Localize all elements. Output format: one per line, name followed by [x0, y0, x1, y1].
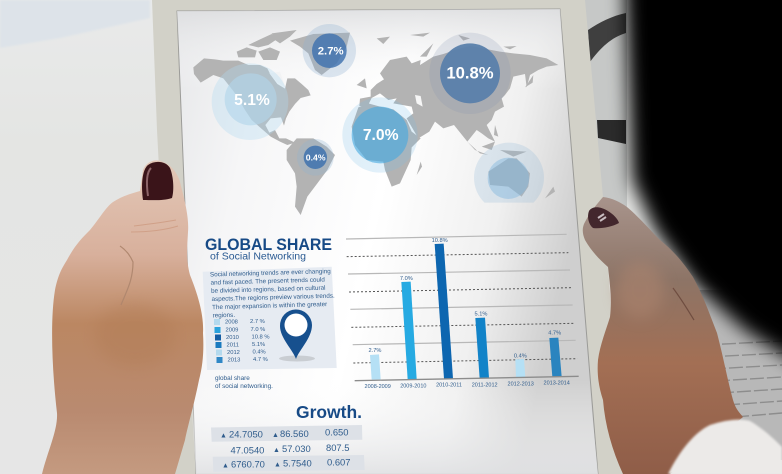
caption: of social networking. [215, 383, 273, 390]
legend: 5.1% [252, 342, 265, 348]
tablet frame [152, 0, 623, 474]
legend: 2011 [226, 342, 239, 348]
axis labels: 2009-2010 [400, 383, 426, 389]
bubble: 2.7% [303, 24, 356, 77]
legend [214, 319, 270, 364]
description text: and fast paced. The present trends could [210, 276, 325, 287]
description text: aspects.The regions preview various trends. [211, 293, 335, 303]
bubble: 7.0% [342, 97, 418, 173]
axis labels [365, 381, 570, 390]
description text [210, 268, 336, 319]
legend: 2008 [225, 320, 238, 326]
bubble: 10.8%: 10.8% [446, 64, 494, 83]
map: Eurasia [359, 46, 558, 142]
bar chart [346, 234, 579, 390]
legend: 0.4% [252, 350, 266, 356]
legend: 2010 [226, 335, 239, 341]
map: Africa [352, 103, 421, 187]
title: Global Share: GLOBAL SHARE [205, 236, 332, 254]
sleeve [668, 420, 782, 474]
description text: regions. [213, 312, 235, 319]
growth table: 0.650 [325, 426, 348, 438]
bubble: 10.8% [429, 33, 511, 114]
axis labels: 2011-2012 [472, 382, 498, 388]
growth table: 807.5 [326, 442, 349, 453]
growth table: 86.560 [280, 428, 309, 439]
title: Global Share: of Social Networking [210, 252, 306, 262]
bubble: 0.4% [297, 139, 334, 176]
growth table: 6760.70 [231, 458, 265, 470]
description text: Social networking trends are ever changing [210, 268, 331, 278]
description text: The major expansion is within the greater [212, 301, 327, 311]
bubble: 5.1%: 5.1% [234, 92, 270, 109]
growth table: 0.607 [327, 456, 350, 468]
legend: 10.8 % [252, 334, 270, 340]
right hand [583, 197, 743, 474]
background: mug and dark area [585, 0, 782, 460]
value labels: 10.8% [432, 238, 448, 244]
legend: 4.7 % [253, 357, 268, 363]
bubble: 2.7%: 2.7% [318, 45, 344, 57]
growth table: 24.7050 [229, 428, 263, 440]
growth table: ▲ [272, 432, 279, 439]
map: North America [193, 58, 311, 145]
map: Australia [488, 158, 530, 197]
growth table: ▲ [222, 462, 229, 470]
world map [193, 30, 558, 215]
title: Global Share [205, 236, 332, 262]
icon: thumbnail polish [142, 162, 173, 200]
bubble: 0.4%: 0.4% [306, 152, 326, 162]
value labels [369, 238, 561, 359]
bubble: 5.1% [212, 63, 288, 140]
axis labels: 2013-2014 [544, 381, 570, 387]
legend: 2013 [228, 358, 240, 364]
bars [370, 354, 381, 380]
legend: 7.0 % [250, 327, 265, 333]
growth table: 47.0540 [230, 444, 264, 456]
growth table: 5.7540 [283, 458, 312, 468]
value labels: 5.1% [475, 312, 487, 318]
legend: 2009 [226, 328, 238, 334]
value labels: 2.7% [369, 348, 381, 354]
axis labels: 2010-2011 [436, 383, 462, 389]
value labels: 7.0% [400, 276, 413, 282]
growth table: ▲ [274, 462, 281, 468]
map: Islands [357, 33, 555, 198]
map: South America [287, 138, 335, 215]
bubble: Australia [474, 143, 544, 203]
panel: description and legend [203, 267, 337, 370]
value labels: 4.7% [548, 331, 561, 337]
caption: global share [215, 375, 250, 382]
legend: 2012 [227, 350, 240, 356]
axis labels: 2008-2009 [365, 384, 391, 390]
map: Greenland [290, 33, 350, 75]
caption [215, 375, 273, 390]
icon: map pin [279, 309, 315, 362]
value labels: 0.4% [514, 353, 527, 359]
growth table [211, 425, 365, 474]
bubble: 7.0%: 7.0% [363, 127, 399, 144]
axis labels: 2012-2013 [508, 382, 534, 388]
growth table: ▲ [220, 432, 227, 440]
map bubbles [212, 24, 544, 203]
description text: be divided into regions, based on cultural [211, 285, 326, 295]
tablet screen [177, 9, 598, 474]
growth heading: Growth. [296, 402, 362, 422]
growth table: ▲ [273, 447, 280, 454]
icon: fingernail polish [588, 207, 619, 228]
left hand [42, 160, 203, 474]
gridlines [346, 234, 576, 345]
growth table: 57.030 [282, 443, 311, 454]
legend: 2.7 % [250, 319, 265, 325]
map: Arctic islands [237, 30, 297, 60]
